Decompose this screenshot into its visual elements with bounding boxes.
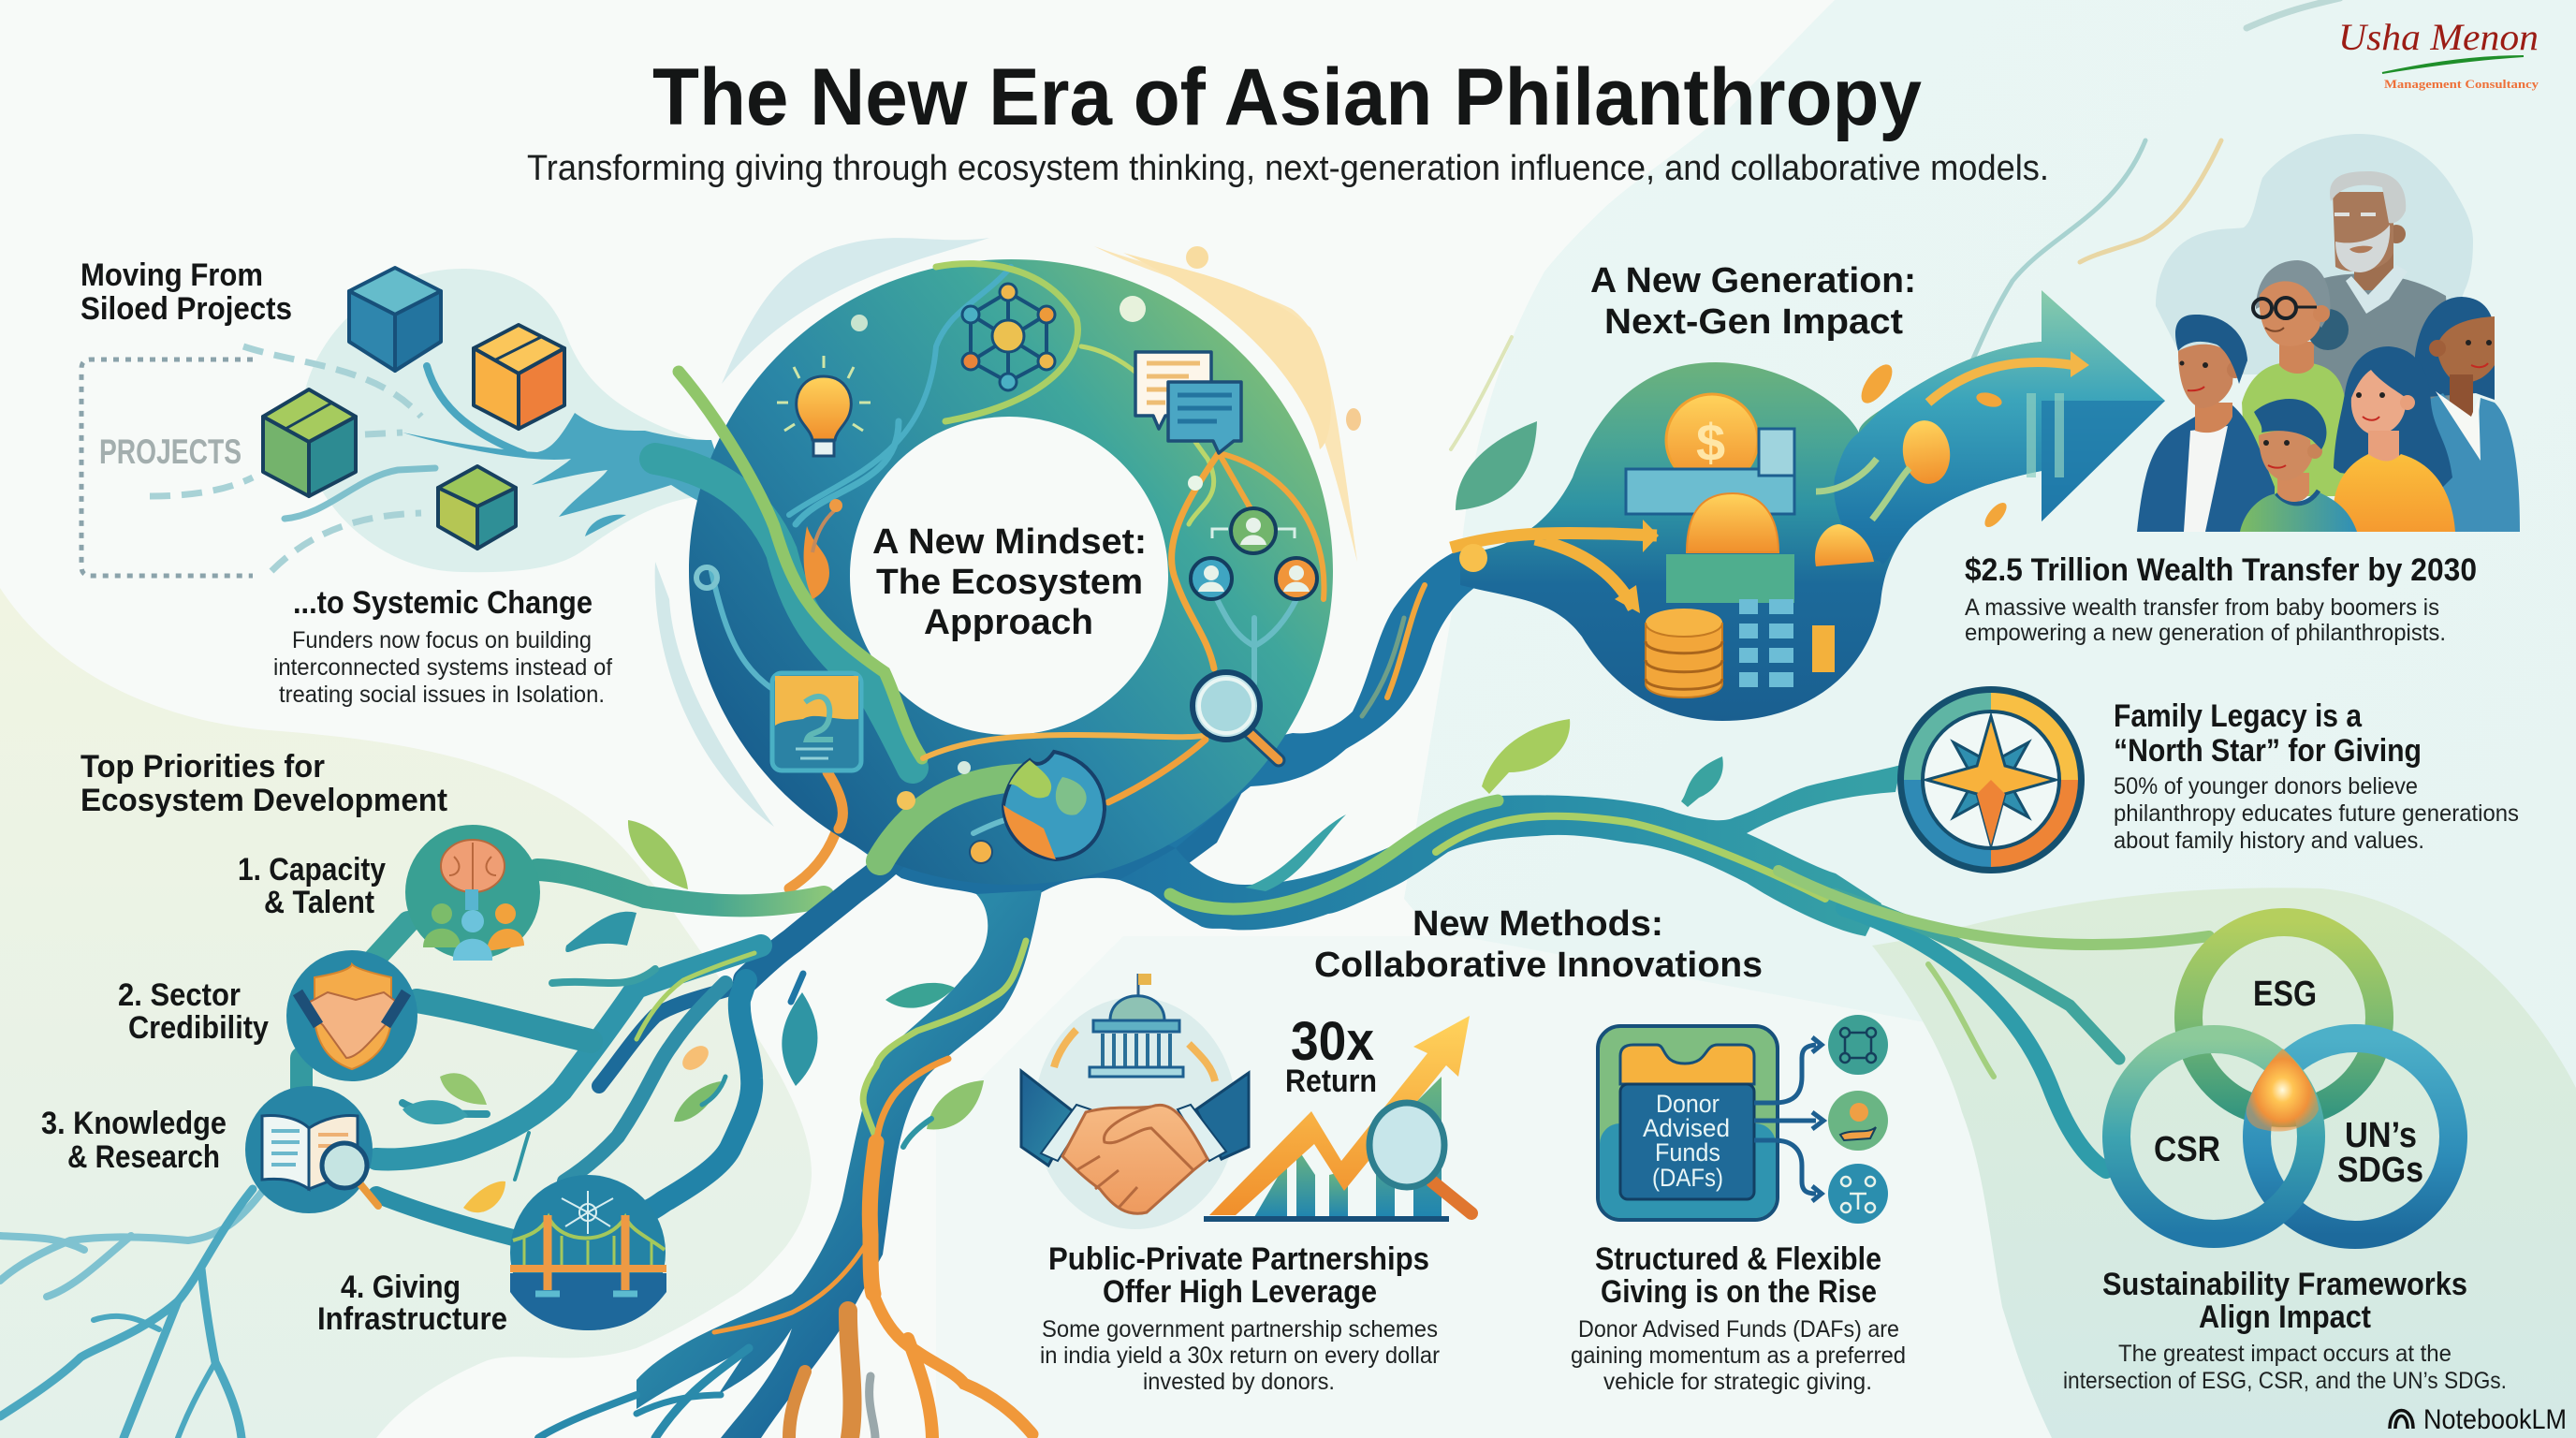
icon: orange box	[474, 325, 564, 429]
chart: 30x return	[1204, 1011, 1471, 1219]
icon: blue cube	[349, 268, 441, 371]
boy	[2240, 399, 2357, 532]
icon: partnership handshake and government building	[1021, 974, 1249, 1229]
text: structured and flexible giving: Giving is on the Rise	[1601, 1274, 1877, 1310]
text: sustainability frameworks	[2063, 1267, 2507, 1394]
icon: green cube	[438, 466, 516, 549]
text: public-private partnerships: invested by donors.	[1143, 1369, 1335, 1395]
text: family legacy: “North Star” for Giving	[2114, 733, 2422, 769]
text: public-private partnerships: in india yield a 30x return on every dollar	[1040, 1343, 1440, 1369]
ring body	[689, 259, 1333, 885]
icon: flame sprout	[804, 499, 842, 599]
label: giving infrastructure: Infrastructure	[317, 1301, 507, 1337]
heading: new methods: Collaborative Innovations	[1314, 946, 1763, 985]
venn labels: SDGs	[2337, 1151, 2423, 1190]
heading: top priorities: Top Priorities for	[80, 749, 325, 785]
older woman	[2242, 260, 2349, 496]
node 3: knowledge and research	[245, 1086, 378, 1213]
heading: new methods: New Methods:	[1412, 904, 1663, 944]
icon: compass	[1897, 686, 2085, 873]
halo	[2156, 134, 2473, 374]
man in jacket	[2137, 315, 2275, 532]
wealth icons	[1451, 351, 2165, 697]
heading: top priorities: Ecosystem Development	[80, 783, 447, 818]
text: public-private partnerships: Some government partnership schemes	[1042, 1316, 1438, 1343]
icon: network	[962, 284, 1055, 390]
text: sustainability frameworks: intersection of ESG, CSR, and the UN’s SDGs.	[2063, 1368, 2507, 1394]
text: family legacy: about family history and values.	[2114, 828, 2424, 854]
text: sustainability frameworks: Align Impact	[2199, 1299, 2371, 1335]
tree: main trunk and branches	[0, 545, 2209, 1438]
label: knowledge and research: 3. Knowledge	[41, 1106, 227, 1141]
node 4: giving infrastructure	[510, 1175, 666, 1330]
text: wealth transfer	[1965, 552, 2477, 646]
leaves	[402, 719, 1723, 1212]
icon: puzzle card	[772, 673, 861, 770]
central title: a new mindset: A New Mindset:	[872, 522, 1147, 562]
leaf	[1456, 421, 1537, 510]
decorative washes around ring	[655, 238, 1361, 827]
title: The New Era of Asian Philanthropy	[652, 52, 1922, 142]
icon: donor advised funds: Donor	[1656, 1090, 1720, 1118]
text: family legacy: 50% of younger donors believe	[2114, 773, 2418, 800]
label: sector credibility	[118, 977, 269, 1046]
label: knowledge and research: & Research	[67, 1139, 220, 1175]
logo: Usha Menon: Management Consultancy	[2384, 77, 2539, 91]
panel: sustainability frameworks	[2063, 922, 2507, 1394]
elder man	[2312, 171, 2457, 487]
ring flowing veins	[655, 264, 1324, 863]
wealth blob and arrow	[1460, 342, 2042, 721]
text: wealth transfer: empowering a new generation of philanthropists.	[1965, 620, 2446, 646]
icon: magnifier	[1193, 672, 1279, 760]
text: to systemic change	[273, 585, 612, 708]
node 1: capacity and talent	[405, 825, 540, 961]
panel: family legacy	[1897, 686, 2519, 873]
text: structured and flexible giving	[1571, 1241, 1906, 1395]
background wash: bottom centre	[936, 936, 2052, 1438]
central title: a new mindset: The Ecosystem	[876, 563, 1143, 602]
icon: donor advised funds: (DAFs)	[1652, 1164, 1723, 1192]
text: wealth transfer: A massive wealth transfer from baby boomers is	[1965, 594, 2439, 621]
arrows from funds to outcomes	[1754, 1037, 1823, 1201]
venn diagram	[2116, 922, 2453, 1235]
heading: new methods	[1314, 904, 1763, 985]
icon: donor advised funds: Advised	[1643, 1114, 1730, 1142]
heading: moving from siloed projects: Siloed Projects	[80, 291, 292, 327]
root strands	[538, 1348, 749, 1438]
central title: a new mindset: Approach	[924, 603, 1093, 642]
text: structured and flexible giving: Structured & Flexible	[1595, 1241, 1881, 1277]
panel: ecosystem ring	[655, 259, 1333, 885]
branch tail to venn	[1844, 908, 2106, 1170]
background wash: lower left	[0, 588, 812, 1438]
heading: top priorities	[80, 749, 447, 818]
background wash: sustainability panel	[1872, 888, 2576, 1438]
text: to systemic change: treating social issues in Isolation.	[279, 682, 605, 708]
dotted projects frame	[81, 360, 253, 576]
label: projects: PROJECTS	[99, 433, 242, 471]
woman on right	[2415, 297, 2520, 532]
text: public-private partnerships: Public-Private Partnerships	[1048, 1241, 1429, 1277]
label: sector credibility: 2. Sector	[118, 977, 241, 1013]
chart: 30x return: 30x	[1291, 1011, 1374, 1072]
mass under the ring	[824, 749, 1264, 898]
text: family legacy: philanthropy educates future generations	[2114, 800, 2519, 827]
orange roots	[714, 1059, 1032, 1438]
text: family legacy	[2114, 698, 2519, 854]
subtitle: Transforming giving through ecosystem thinking, next-generation influence, and collaborative models.	[527, 149, 2049, 188]
label: capacity and talent: & Talent	[264, 885, 374, 920]
family illustration	[2137, 134, 2520, 532]
decorative curves: top right	[1451, 0, 2340, 449]
heading: new generation	[1590, 261, 1916, 342]
icon: globe puzzle	[1003, 752, 1105, 859]
text: family legacy: Family Legacy is a	[2114, 698, 2363, 734]
soft circle behind cubes	[301, 269, 711, 572]
venn labels: UN’s	[2345, 1116, 2417, 1155]
young woman	[2333, 346, 2455, 532]
icon: speech bubbles	[1135, 352, 1241, 453]
trunk	[637, 890, 1042, 1438]
fine roots at left	[0, 1180, 271, 1297]
growth arrow overlay	[1834, 290, 2165, 565]
icon: donor advised funds: Funds	[1655, 1138, 1720, 1167]
branch ribbon to compass and venn	[1120, 765, 1901, 936]
text: structured and flexible giving: vehicle for strategic giving.	[1603, 1369, 1872, 1395]
text: to systemic change: Funders now focus on building	[292, 627, 592, 653]
panel: top priorities	[41, 749, 666, 1337]
text: sustainability frameworks: The greatest impact occurs at the	[2118, 1341, 2452, 1367]
chart: 30x return: Return	[1285, 1064, 1377, 1099]
heading: new generation: A New Generation:	[1590, 261, 1916, 301]
label: giving infrastructure	[317, 1269, 507, 1337]
label: capacity and talent	[238, 852, 386, 920]
orange stem from puzzle card	[789, 824, 839, 888]
venn labels: ESG	[2253, 975, 2317, 1014]
heading: moving from siloed projects: Moving From	[80, 257, 263, 293]
right branch to wealth blob	[1123, 545, 1488, 848]
heading: moving from siloed projects	[80, 257, 292, 327]
section: siloed projects to systemic change	[80, 257, 739, 708]
panel: new methods	[1021, 904, 1906, 1395]
central title: a new mindset	[872, 522, 1147, 642]
trunk lime vein	[863, 941, 1026, 1137]
text: sustainability frameworks: Sustainability Frameworks	[2102, 1267, 2467, 1302]
text: structured and flexible giving: gaining momentum as a preferred	[1571, 1343, 1906, 1369]
text: structured and flexible giving: Donor Advised Funds (DAFs) are	[1578, 1316, 1899, 1343]
label: knowledge and research	[41, 1106, 227, 1175]
node 2: sector credibility	[286, 950, 417, 1081]
venn labels	[2154, 975, 2423, 1190]
icon: light bulb	[777, 356, 871, 456]
text: public-private partnerships	[1040, 1241, 1440, 1395]
wealth icons: $	[1696, 413, 1725, 472]
text: to systemic change: interconnected systems instead of	[273, 654, 612, 681]
left branches	[537, 870, 824, 905]
venn labels: CSR	[2154, 1130, 2220, 1169]
stream from cubes into ring	[150, 346, 739, 571]
text: public-private partnerships: Offer High Leverage	[1103, 1274, 1377, 1310]
label: giving infrastructure: 4. Giving	[341, 1269, 461, 1305]
label: sector credibility: Credibility	[128, 1010, 269, 1046]
label: capacity and talent: 1. Capacity	[238, 852, 386, 888]
heading: new generation: Next-Gen Impact	[1604, 302, 1903, 342]
text: to systemic change: ...to Systemic Change	[293, 585, 593, 621]
icon: green box	[263, 389, 356, 496]
background wash: right side	[1404, 0, 2576, 1438]
text: wealth transfer: $2.5 Trillion Wealth Transfer by 2030	[1965, 552, 2477, 588]
icon: people tree	[1191, 508, 1317, 599]
logo: Usha Menon: Usha Menon	[2338, 16, 2539, 58]
icon: donor advised funds	[1598, 1026, 1778, 1220]
icons: outcome circles	[1828, 1015, 1888, 1224]
panel: new generation	[1451, 134, 2520, 721]
logo: Usha Menon	[2338, 16, 2539, 91]
